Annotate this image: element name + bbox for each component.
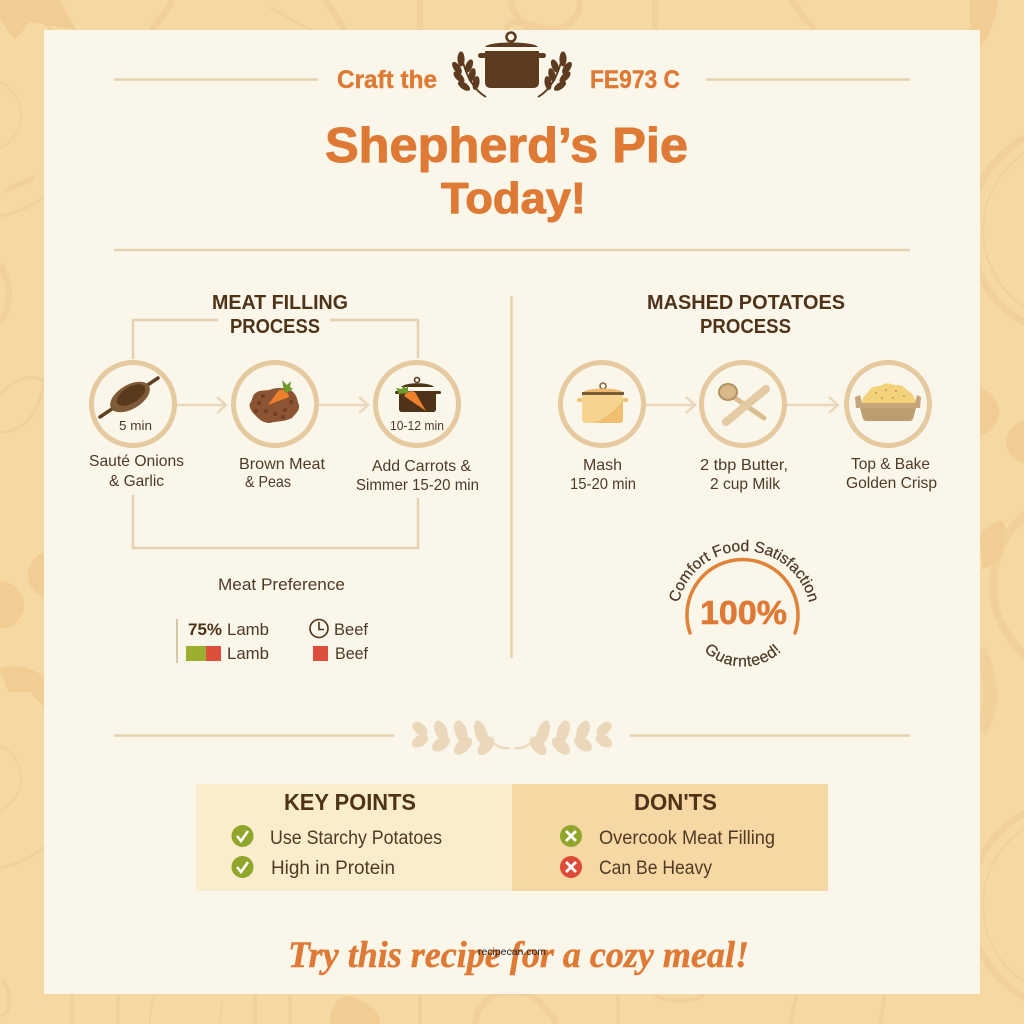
badge: comfort food satisfaction: Guarnteed! [706, 644, 780, 667]
step: mash: Mash [583, 457, 622, 474]
step 1: saute [89, 362, 184, 490]
step: mash: 15-20 min [570, 476, 636, 493]
panel: meat preference legend: Lamb [227, 644, 269, 663]
badge: comfort food satisfaction: 100% [700, 594, 787, 631]
arrow: step 2 to step 3 [318, 397, 368, 413]
header eyebrow: Craft the + pot + FE973 C: FE973 C [590, 66, 680, 94]
panel: key points: Use Starchy Potatoes [270, 828, 442, 849]
step 3: simmer: Simmer 15-20 min [356, 477, 479, 494]
divider: laurel [114, 719, 910, 758]
panel: meat preference legend [177, 575, 368, 663]
badge: comfort food satisfaction [670, 540, 817, 667]
step: butter and milk [700, 362, 788, 493]
heading: meat filling process: MEAT FILLING [212, 292, 348, 314]
swatch: lamb [186, 646, 221, 661]
step: butter and milk: 2 tbp Butter, [700, 457, 788, 474]
step 2: brown meat [234, 362, 326, 491]
arrow: mash to butter [646, 397, 695, 413]
panel: key points [196, 784, 512, 891]
step 3: simmer: 10-12 min [390, 419, 444, 433]
header eyebrow: Craft the + pot + FE973 C: Craft the [337, 66, 437, 94]
panel: meat preference legend: Meat Preference [218, 575, 345, 594]
badge: comfort food satisfaction: Comfort Food Satisfaction [670, 540, 817, 602]
heading: mashed potatoes process: PROCESS [700, 316, 791, 338]
step 1: saute: Sauté Onions [89, 453, 184, 470]
icon: green cross [560, 825, 582, 847]
heading: meat filling process [212, 292, 348, 338]
panel: key points: High in Protein [271, 858, 395, 879]
icon: check [232, 825, 254, 847]
heading: mashed potatoes process: MASHED POTATOES [647, 292, 845, 314]
title: Shepherd’s Pie [325, 119, 688, 173]
panel: meat preference legend: 75% [188, 621, 222, 639]
arrow: butter to bake [787, 397, 838, 413]
step: top and bake: Golden Crisp [846, 475, 937, 492]
panel: meat preference legend: Beef [335, 644, 368, 663]
icon: red cross [560, 856, 582, 878]
step: top and bake: Top & Bake [851, 456, 930, 473]
swatch: beef [313, 646, 328, 661]
step: mash [560, 362, 644, 493]
step 3: simmer [356, 362, 479, 494]
footer call to action: Try this recipe for a cozy meal! [288, 935, 749, 976]
panel: don'ts: Can Be Heavy [599, 858, 712, 879]
title: Today! [441, 174, 586, 223]
heading: meat filling process: PROCESS [230, 316, 320, 338]
panel: don'ts: Overcook Meat Filling [599, 828, 775, 849]
arrow: step 1 to step 2 [177, 397, 226, 413]
header eyebrow: Craft the + pot + FE973 C [114, 66, 910, 94]
step 1: saute: 5 min [119, 419, 152, 433]
panel: don'ts: DON'TS [634, 789, 717, 815]
step: butter and milk: 2 cup Milk [710, 476, 781, 493]
step 3: simmer: Add Carrots & [372, 458, 471, 475]
panel: meat preference legend: Beef [334, 620, 368, 639]
title [325, 119, 688, 223]
icon: check [232, 856, 254, 878]
panel: meat filling process [89, 292, 479, 548]
step: top and bake [846, 362, 937, 492]
panel: meat preference legend: Lamb [227, 620, 269, 639]
panel: mashed potatoes process [560, 292, 937, 493]
loop connector lines [133, 320, 418, 548]
heading: mashed potatoes process [647, 292, 845, 338]
step 2: brown meat: Brown Meat [239, 456, 326, 473]
panel: don'ts [512, 784, 828, 891]
step 1: saute: & Garlic [109, 473, 164, 490]
icon: clock [310, 620, 328, 638]
watermark: recipecan.com [478, 946, 546, 958]
icon: pot with wheat [450, 32, 574, 97]
panel: key points: KEY POINTS [284, 789, 416, 815]
step 2: brown meat: & Peas [245, 474, 291, 491]
